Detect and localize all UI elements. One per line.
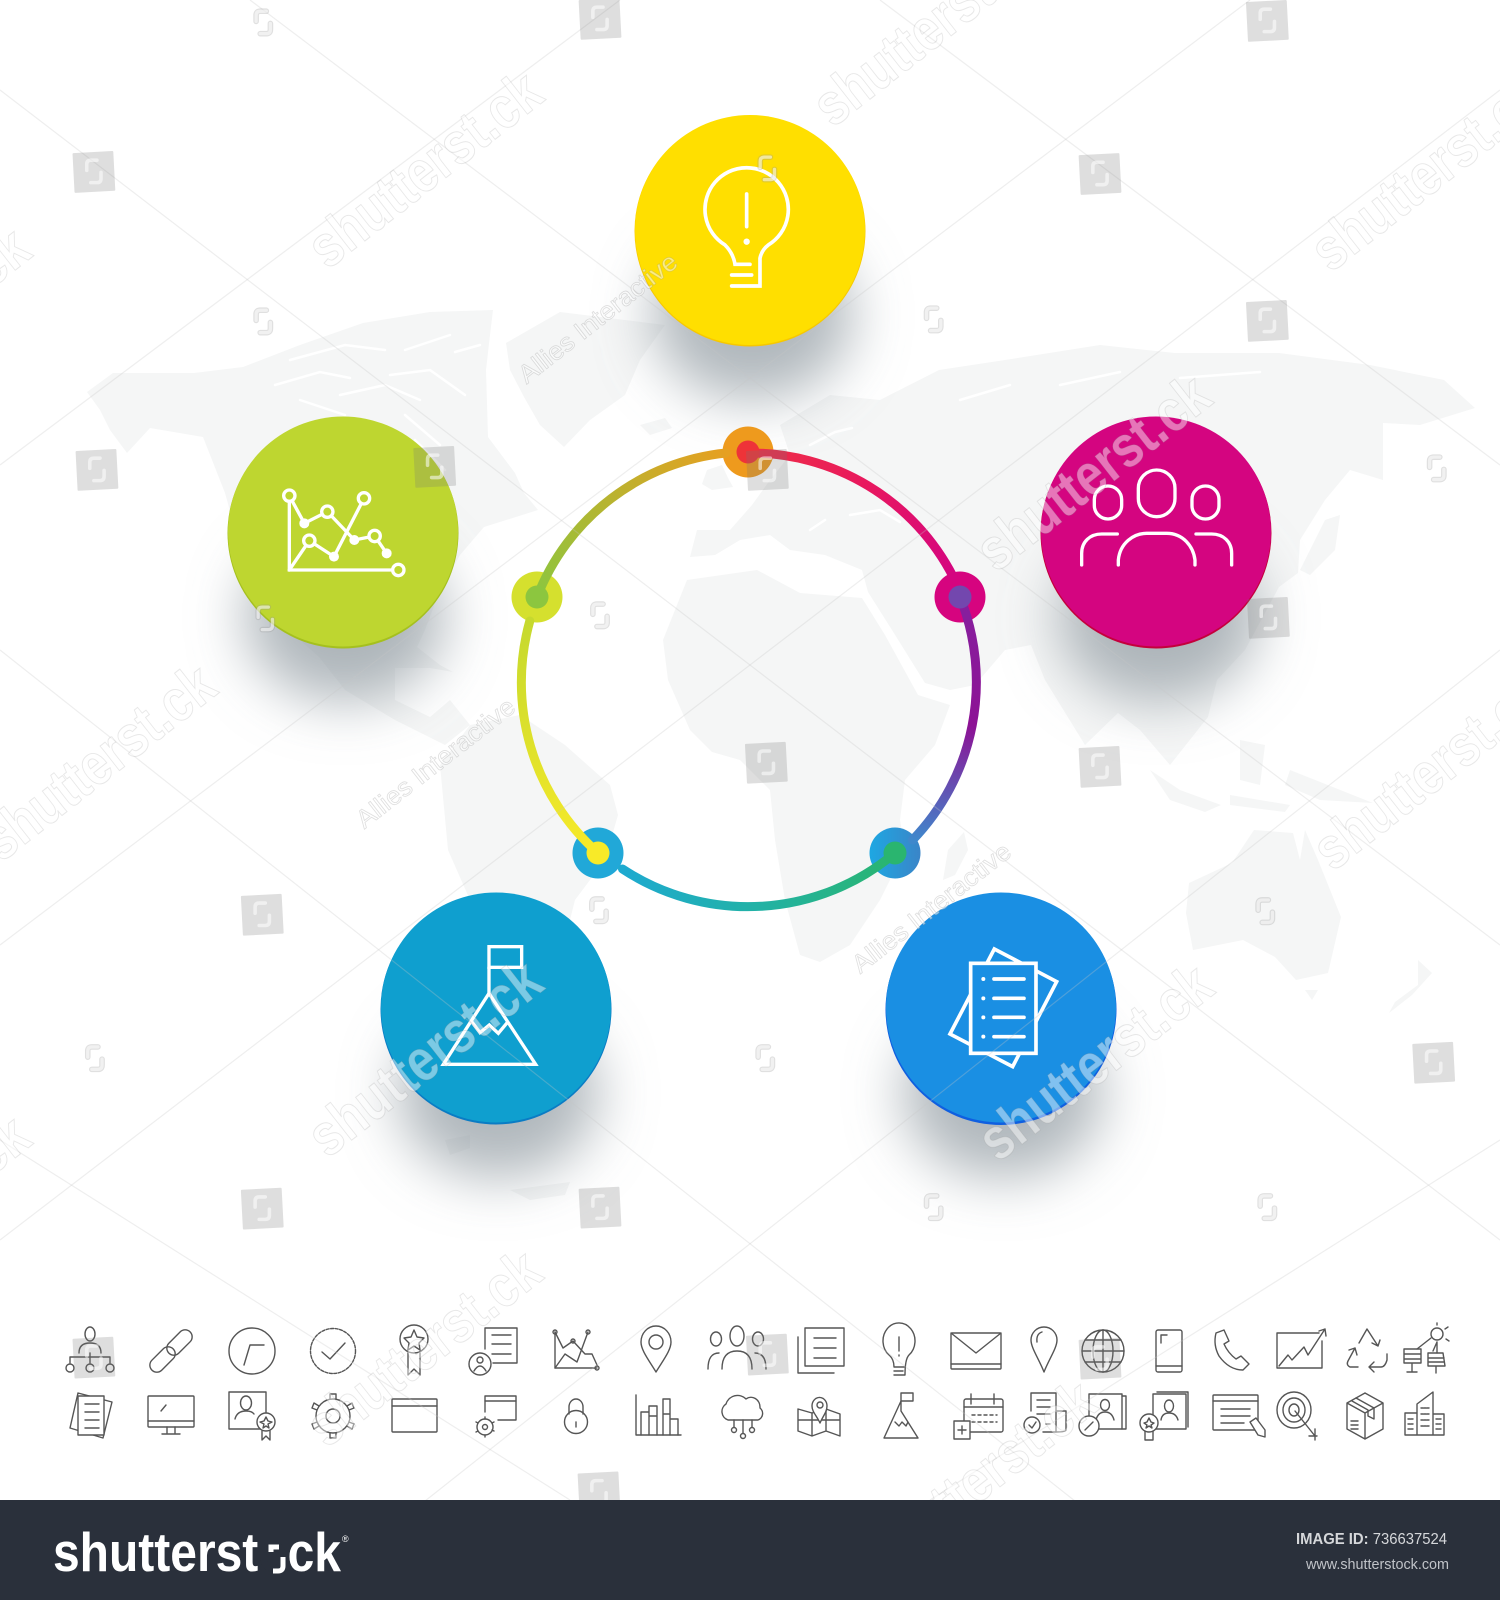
icon: globe (1082, 1330, 1124, 1372)
icon: check seal (310, 1328, 356, 1374)
icon: telephone handset (1215, 1330, 1249, 1370)
icon: light bulb (705, 168, 788, 286)
gradient ring (521, 453, 976, 907)
circle shadows (245, 230, 1258, 1178)
image id: IMAGE ID: 736637524 (1296, 1531, 1447, 1548)
icon: list page (798, 1328, 844, 1373)
ring outer nodes (512, 426, 986, 878)
icon: folded map (798, 1397, 840, 1436)
icon: padlock (564, 1399, 588, 1434)
icon: cardboard box (1347, 1393, 1383, 1439)
panel: teal mountain circle (380, 892, 612, 1124)
icon: bar chart (636, 1395, 681, 1435)
icon: monitor (148, 1396, 194, 1434)
icon: chain link (147, 1327, 195, 1375)
icon: cloud network (722, 1395, 763, 1438)
world map (87, 310, 1475, 1200)
watermark overlay: Allies Interactive (847, 838, 1017, 979)
footer logo: ® (342, 1534, 349, 1544)
icon: smartphone (1156, 1330, 1182, 1372)
watermark overlay: shutterst.ck (293, 1235, 553, 1459)
panel: yellow idea circle (634, 115, 866, 346)
watermark overlay: shutterst.ck (963, 360, 1223, 584)
icon: gear (312, 1394, 354, 1438)
icon: mountain flag (443, 947, 536, 1064)
icon: award ribbon (400, 1325, 428, 1375)
watermark overlay: shutterst.ck (848, 1366, 1108, 1590)
ring inner dots (526, 440, 972, 864)
icon: plain pin (1031, 1327, 1057, 1372)
icon: small mountain (884, 1393, 918, 1438)
icon: person with award (1140, 1392, 1188, 1440)
icon: city buildings (1405, 1392, 1444, 1435)
icon: form with pencil (1213, 1395, 1265, 1437)
footer logo: shutterstock (53, 1521, 341, 1583)
icon: calendar plus (954, 1394, 1003, 1439)
watermark overlay: shutterst.ck (965, 950, 1225, 1173)
icon: browser window (392, 1399, 437, 1432)
icon: documents small (70, 1393, 112, 1438)
panel: blue documents circle (886, 892, 1116, 1125)
icon: map pin (641, 1326, 671, 1372)
watermark overlay: Allies Interactive (513, 248, 683, 389)
icon: recycle (1347, 1329, 1387, 1372)
icon: solar panels (1404, 1323, 1449, 1373)
footer bar (0, 1500, 1500, 1600)
website: www.shutterstock.com (1305, 1556, 1449, 1573)
icon: target with arrow (1277, 1392, 1317, 1440)
small icon set (66, 1323, 1449, 1440)
icon: documents (950, 949, 1057, 1067)
icon: clock (229, 1328, 275, 1374)
icon: small bulb (883, 1323, 915, 1375)
icon: org chart (66, 1327, 114, 1372)
icon: browser with gear (476, 1396, 516, 1437)
icon: people group (708, 1326, 766, 1369)
panel: magenta people circle (1040, 416, 1272, 648)
icon: contract with shield (1024, 1393, 1066, 1433)
panel: green chart circle (228, 416, 458, 648)
icon: person with link (1079, 1394, 1126, 1436)
icon: portrait with award (229, 1392, 275, 1440)
icon: small line chart (553, 1330, 599, 1370)
watermark overlay: shutterst.ck (294, 57, 554, 281)
watermark overlay: shutterst.ck (294, 946, 554, 1169)
icon: profile document (469, 1328, 517, 1375)
icon: line chart (284, 490, 404, 576)
icon: envelope (951, 1333, 1001, 1369)
icon: people (1082, 470, 1232, 565)
icon: growth chart (1277, 1329, 1326, 1368)
watermark overlay: Allies Interactive (351, 693, 521, 834)
